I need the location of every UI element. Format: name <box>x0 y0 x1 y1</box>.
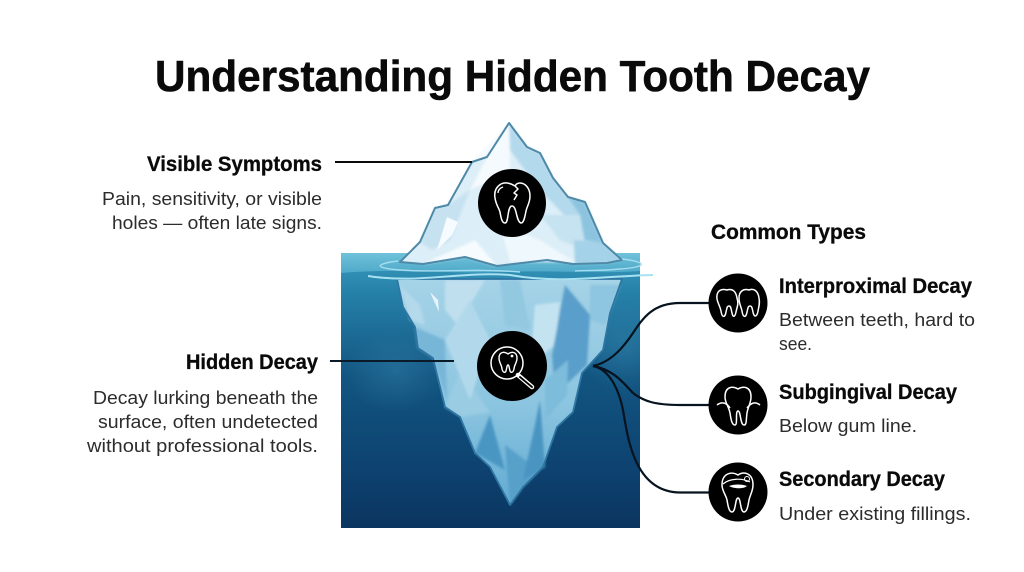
text block: hidden decay: Hidden Decay <box>186 351 318 374</box>
iceberg below water <box>397 279 622 505</box>
water surface ripples <box>368 259 653 279</box>
item: interproximal decay: Interproximal Decay <box>779 275 972 298</box>
item: subgingival decay: Subgingival Decay <box>779 381 957 404</box>
connectors: common types branches <box>593 303 710 492</box>
item: secondary decay: Secondary Decay <box>779 468 945 491</box>
item: interproximal decay <box>708 274 975 354</box>
icon: cracked tooth <box>478 169 546 237</box>
icon: two adjacent teeth <box>708 274 768 332</box>
text block: visible symptoms: Visible Symptoms <box>147 153 322 176</box>
item: secondary decay: Under existing fillings. <box>779 503 971 524</box>
text block: visible symptoms: Pain, sensitivity, or visible <box>102 188 322 209</box>
title: Understanding Hidden Tooth Decay <box>155 52 871 101</box>
heading: common types: Common Types <box>711 221 866 244</box>
icon: tooth with filling <box>708 462 768 522</box>
item: subgingival decay: Below gum line. <box>779 415 917 436</box>
icon: magnifying glass over tooth <box>477 331 547 401</box>
iceberg above water <box>400 123 622 266</box>
item: secondary decay <box>708 462 971 524</box>
water panel <box>341 253 670 528</box>
text block: visible symptoms <box>102 153 322 233</box>
item: subgingival decay <box>708 376 957 436</box>
connector: visible symptoms <box>335 161 472 163</box>
text block: visible symptoms: holes — often late signs. <box>112 212 322 233</box>
item: interproximal decay: see. <box>779 333 812 354</box>
item: interproximal decay: Between teeth, hard to <box>779 309 975 330</box>
text block: hidden decay: without professional tools. <box>86 435 318 456</box>
icon: tooth below gum line <box>708 376 768 434</box>
text block: hidden decay: surface, often undetected <box>98 411 318 432</box>
connector: hidden decay <box>330 360 454 362</box>
text block: hidden decay: Decay lurking beneath the <box>93 387 318 408</box>
text block: hidden decay <box>86 351 318 456</box>
